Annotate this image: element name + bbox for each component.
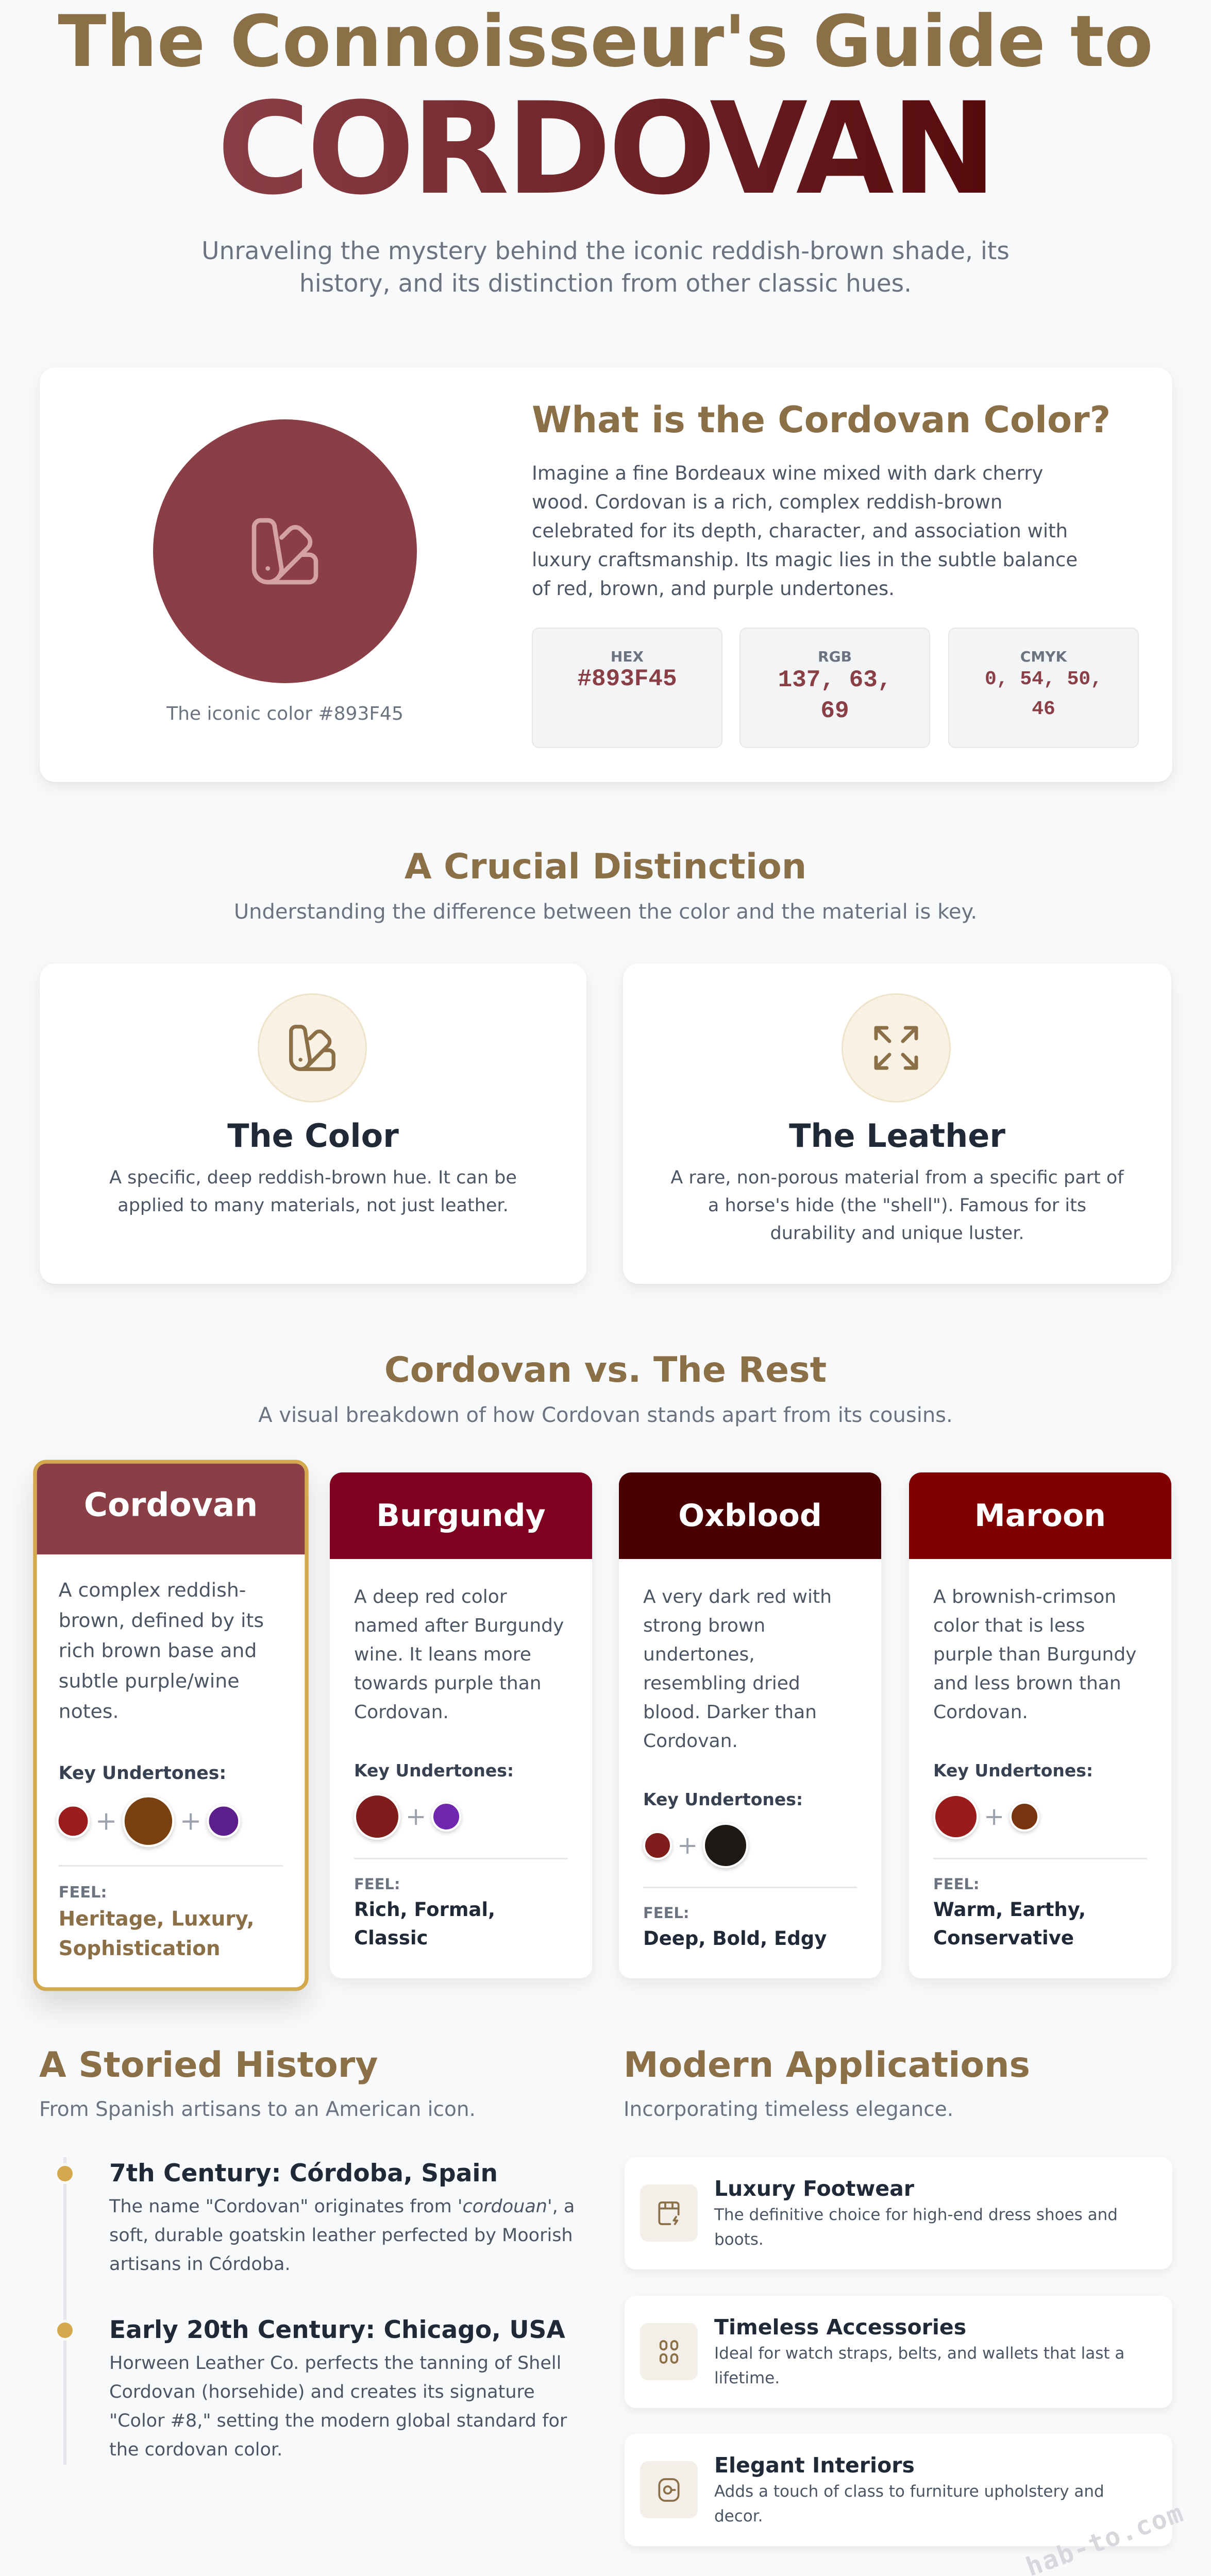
item 2 description: Cordovan (horsehide) and creates its signature: [109, 2382, 535, 2402]
paragraph: wood. Cordovan is a rich, complex reddish-brown: [532, 491, 1002, 513]
panel: the leather: [623, 963, 1171, 1284]
description: decor.: [714, 2507, 763, 2526]
color box: CMYK: 0, 54, 50,: [985, 668, 1102, 690]
item 1 description: soft, durable goatskin leather perfected by Moorish: [109, 2225, 573, 2246]
color circle: [153, 419, 417, 683]
feel value: Warm, Earthy,: [933, 1899, 1086, 1921]
description: [714, 2344, 1124, 2387]
description: Cordovan.: [933, 1702, 1028, 1723]
feel value: [59, 1907, 255, 1960]
feel value: Sophistication: [59, 1937, 221, 1960]
item 1 title: 7th Century: Córdoba, Spain: [109, 2159, 498, 2188]
description: A complex reddish-: [59, 1580, 246, 1602]
title: The Connoisseur's Guide to: [58, 0, 1153, 83]
item 2 description: the cordovan color.: [109, 2439, 282, 2460]
description: towards purple than: [354, 1673, 542, 1694]
card: Oxblood: [619, 1472, 881, 1978]
item 2 description: Horween Leather Co. perfects the tanning of Shell: [109, 2353, 561, 2374]
icon: accessories: [640, 2323, 698, 2380]
feel: FEEL:: [933, 1875, 980, 1893]
feel value: Conservative: [933, 1927, 1074, 1949]
description: A very dark red with: [643, 1586, 832, 1607]
swatches: [55, 1795, 242, 1851]
header: Burgundy: [376, 1498, 546, 1534]
description: wine. It leans more: [354, 1644, 531, 1665]
description: blood. Darker than: [643, 1702, 817, 1723]
description: Cordovan.: [354, 1702, 449, 1723]
item 2 title: Early 20th Century: Chicago, USA: [109, 2316, 565, 2344]
subtitle: history, and its distinction from other classic hues.: [299, 269, 912, 298]
color box: RGB: 69: [820, 698, 849, 724]
color box: RGB: RGB: [818, 648, 852, 665]
description: [643, 1586, 832, 1752]
description: color that is less: [933, 1615, 1085, 1636]
card: Burgundy: [330, 1472, 592, 1978]
color box: HEX: [532, 628, 722, 748]
heading: history: A Storied History: [39, 2045, 378, 2086]
title: The Color: [227, 1117, 399, 1155]
description: Ideal for watch straps, belts, and wallets that last a: [714, 2344, 1124, 2363]
card: Cordovan: [33, 1460, 309, 1991]
title: The Leather: [789, 1117, 1005, 1155]
feel value: Deep, Bold, Edgy: [643, 1927, 827, 1950]
paragraph: celebrated for its depth, character, and association with: [532, 520, 1068, 542]
description: applied to many materials, not just leather.: [117, 1195, 509, 1216]
icon: swatch: [258, 993, 367, 1103]
subtitle: applications: Incorporating timeless elegance.: [624, 2098, 953, 2121]
icon: swatch book: [251, 518, 318, 584]
header: Cordovan: [84, 1486, 258, 1524]
header: [619, 1472, 881, 1559]
swatches: +: [677, 1831, 698, 1860]
heading: applications: Modern Applications: [624, 2045, 1030, 2086]
title: Elegant Interiors: [714, 2453, 915, 2478]
subtitle: Unraveling the mystery behind the iconic reddish-brown shade, its: [201, 237, 1010, 265]
description: [714, 2482, 1104, 2526]
heading: distinction: A Crucial Distinction: [405, 846, 806, 887]
description: [354, 1586, 564, 1723]
description: The definitive choice for high-end dress shoes and: [714, 2206, 1118, 2224]
feel value: Rich, Formal,: [354, 1899, 495, 1921]
divider: [933, 1858, 1147, 1859]
panel: what is cordovan: [40, 367, 1172, 782]
description: notes.: [59, 1701, 119, 1723]
timeline: [57, 2157, 575, 2465]
header: Oxblood: [678, 1498, 822, 1534]
description: boots.: [714, 2230, 764, 2249]
card: Maroon: [909, 1472, 1171, 1978]
feel: FEEL:: [643, 1904, 689, 1922]
description: subtle purple/wine: [59, 1670, 239, 1692]
subtitle: [201, 237, 1010, 298]
description: undertones,: [643, 1644, 755, 1665]
paragraph: luxury craftsmanship. Its magic lies in the subtle balance: [532, 549, 1078, 571]
description: A deep red color: [354, 1586, 507, 1607]
key undertones: Key Undertones:: [933, 1760, 1093, 1781]
header: Maroon: [974, 1498, 1106, 1534]
header: [909, 1472, 1171, 1559]
subtitle: distinction: Understanding the difference between the color and the material is key.: [234, 900, 977, 924]
feel: FEEL:: [354, 1875, 400, 1893]
description: lifetime.: [714, 2369, 780, 2387]
description: named after Burgundy: [354, 1615, 564, 1636]
heading: vs the rest: Cordovan vs. The Rest: [384, 1350, 827, 1391]
swatches: +: [406, 1802, 426, 1831]
feel value: Heritage, Luxury,: [59, 1907, 255, 1930]
swatches: [352, 1793, 463, 1843]
app card: footwear: [625, 2157, 1172, 2269]
description: strong brown: [643, 1615, 765, 1636]
description: purple than Burgundy: [933, 1644, 1137, 1665]
icon: expand: [842, 993, 951, 1103]
color box: HEX: #893F45: [577, 666, 677, 692]
description: [109, 1167, 517, 1216]
description: a horse's hide (the "shell"). Famous for its: [708, 1195, 1086, 1216]
paragraph: [532, 462, 1078, 600]
paragraph: Imagine a fine Bordeaux wine mixed with dark cherry: [532, 462, 1043, 484]
description: A brownish-crimson: [933, 1586, 1116, 1607]
feel value: Classic: [354, 1927, 428, 1949]
color box: HEX: HEX: [611, 648, 644, 665]
icon: footwear: [640, 2184, 698, 2242]
color box: CMYK: CMYK: [1020, 648, 1067, 665]
description: A rare, non-porous material from a specific part of: [670, 1167, 1124, 1188]
description: rich brown base and: [59, 1640, 257, 1662]
key undertones: Key Undertones:: [354, 1760, 514, 1781]
description: [59, 1580, 264, 1723]
description: [714, 2206, 1118, 2249]
key undertones: Key Undertones:: [59, 1762, 226, 1783]
title: CORDOVAN: CORDOVAN: [217, 76, 994, 223]
header: [330, 1472, 592, 1559]
divider: [354, 1858, 568, 1859]
description: resembling dried: [643, 1673, 800, 1694]
item 1 description: The name "Cordovan" originates from 'cordouan', a: [109, 2196, 575, 2217]
description: [670, 1167, 1124, 1244]
heading: What is the Cordovan Color?: [532, 399, 1111, 441]
feel: FEEL:: [59, 1883, 107, 1901]
item 2 description: [109, 2353, 567, 2460]
swatches: +: [984, 1802, 1004, 1831]
color box: RGB: 137, 63,: [778, 667, 892, 693]
timeline line: [63, 2157, 66, 2465]
title: Luxury Footwear: [714, 2176, 914, 2201]
header: [33, 1460, 309, 1554]
color box: CMYK: [948, 628, 1139, 748]
dot 2: [57, 2323, 73, 2338]
caption: The iconic color #893F45: [166, 703, 403, 724]
swatches: [932, 1794, 1041, 1842]
description: brown, defined by its: [59, 1609, 264, 1632]
divider: [59, 1865, 283, 1867]
app card: accessories: [625, 2296, 1172, 2408]
description: Cordovan.: [643, 1731, 738, 1752]
dot 1: [57, 2166, 73, 2181]
feel value: [354, 1899, 495, 1949]
title: Timeless Accessories: [714, 2315, 966, 2340]
description: and less brown than: [933, 1673, 1121, 1694]
item 2 description: "Color #8," setting the modern global standard for: [109, 2411, 567, 2431]
swatches: [641, 1823, 750, 1871]
divider: [643, 1887, 857, 1888]
subtitle: vs the rest: A visual breakdown of how Cordovan stands apart from its cousins.: [258, 1403, 953, 1427]
description: A specific, deep reddish-brown hue. It can be: [109, 1167, 517, 1188]
app card: interiors: [625, 2434, 1172, 2546]
panel: the color: [40, 963, 586, 1284]
item 1 description: [109, 2196, 575, 2275]
color box: RGB: [739, 628, 930, 748]
color box: CMYK: 46: [1032, 698, 1055, 720]
description: [933, 1586, 1137, 1723]
subtitle: history: From Spanish artisans to an American icon.: [39, 2098, 476, 2121]
feel value: [933, 1899, 1086, 1949]
key undertones: Key Undertones:: [643, 1789, 803, 1809]
icon: interiors: [640, 2461, 698, 2518]
swatches: +: [180, 1806, 201, 1836]
description: durability and unique luster.: [770, 1223, 1024, 1244]
paragraph: of red, brown, and purple undertones.: [532, 578, 895, 600]
item 1 description: artisans in Córdoba.: [109, 2254, 291, 2275]
description: Adds a touch of class to furniture upholstery and: [714, 2482, 1104, 2501]
swatches: +: [95, 1806, 117, 1836]
